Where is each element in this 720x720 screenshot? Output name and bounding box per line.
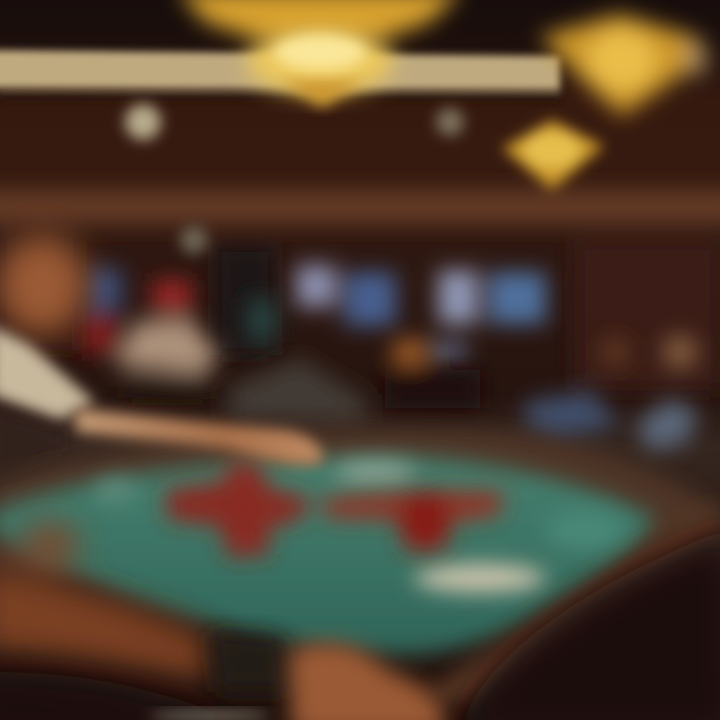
ceiling spotlights [125,104,464,254]
green table felt [0,456,655,655]
felt highlights [95,461,625,592]
chandelier: upper right [540,14,707,116]
chandelier: top centre [178,0,462,108]
player: head and white shirt at left [0,235,95,480]
outstretched arm [75,408,323,465]
lower sleeve highlight [150,710,270,720]
dark lower left corner [0,672,215,720]
background table and lamp [228,338,480,425]
background crowd: left group [82,268,277,398]
chandelier: lower right [502,120,604,190]
table rim [0,429,720,570]
ceiling beam [0,50,560,101]
red chips on table [165,460,505,558]
foreground shoulder at bottom right [458,525,720,720]
background crowd: blue screens [296,265,546,362]
foreground hand [288,642,448,720]
right table edge [420,505,720,705]
foreground arm at bottom left [0,523,215,682]
wristband [208,632,290,692]
wooden wall panels [0,190,720,390]
background crowd: right group [525,334,698,452]
